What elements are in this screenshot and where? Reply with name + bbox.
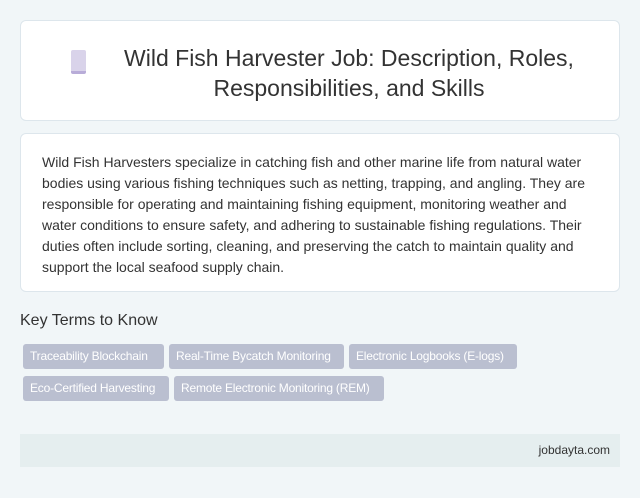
footer bbox=[20, 434, 620, 467]
tags: Traceability Blockchain bbox=[30, 349, 148, 363]
heading: key terms: Key Terms to Know bbox=[20, 312, 158, 329]
footer text: jobdayta.com bbox=[539, 443, 610, 457]
tags: Remote Electronic Monitoring (REM) bbox=[181, 381, 370, 395]
tags: Real-Time Bycatch Monitoring bbox=[176, 349, 331, 363]
tags: Eco-Certified Harvesting bbox=[30, 381, 155, 395]
icon: document bbox=[71, 50, 86, 74]
tags: Electronic Logbooks (E-logs) bbox=[356, 349, 504, 363]
description text: Wild Fish Harvesters specialize in catching fish and other marine life from natural water bodies using various fishing techniques such as netting, trapping, and angling. They are responsible for operating and maintaining fishing equipment, monitoring weather and water conditions to ensure safety, and adhering to sustainable fishing regulations. Their duties often include sorting, cleaning, and preserving the catch to maintain quality and support the local seafood supply chain. bbox=[42, 154, 585, 275]
description card bbox=[20, 133, 620, 292]
header card bbox=[20, 20, 620, 121]
title: Wild Fish Harvester Job: Description, Roles, Responsibilities, and Skills bbox=[124, 45, 574, 101]
